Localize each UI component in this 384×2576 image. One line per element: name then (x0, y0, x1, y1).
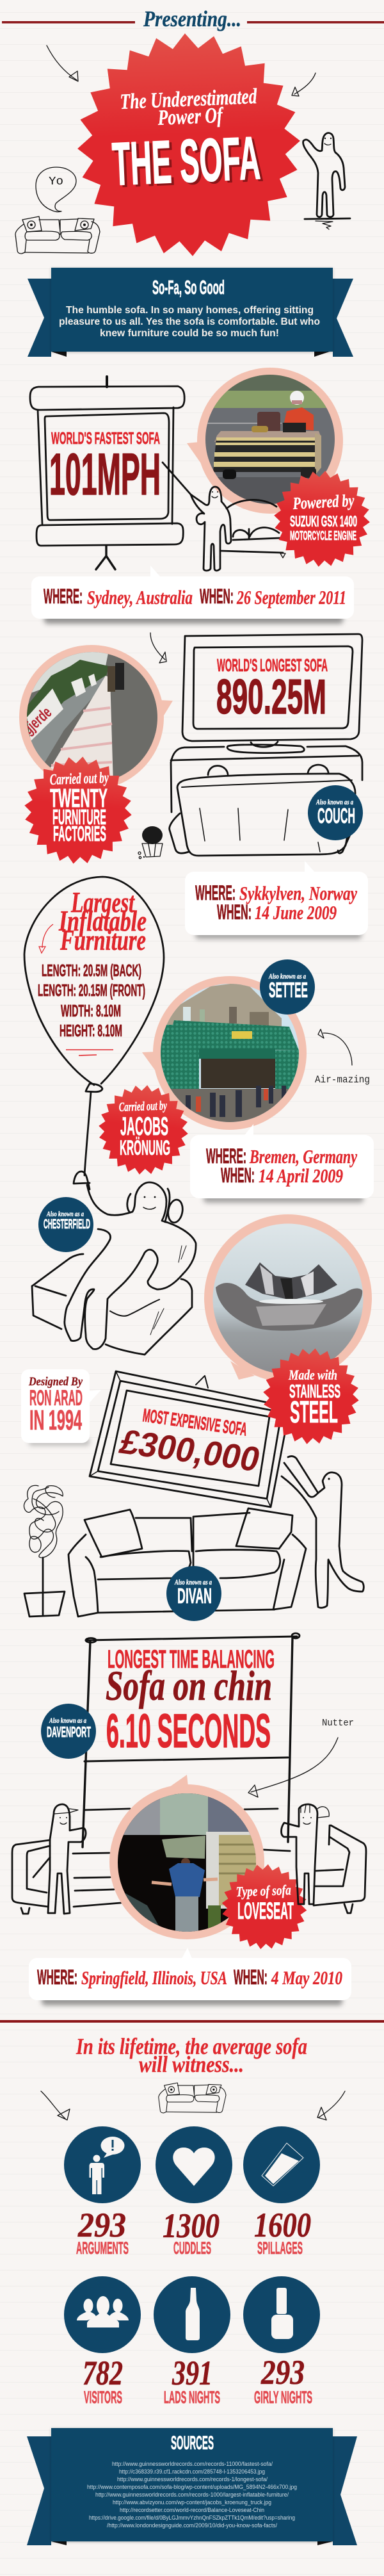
photo bubble: inflatable sofa (142, 976, 307, 1130)
starburst: powered by Suzuki: Powered by (292, 491, 355, 513)
stat: spillages (243, 2126, 320, 2258)
drawing: large sofa (68, 1508, 306, 1617)
panel: largest inflatable furniture (24, 877, 374, 1355)
callout: where and when Norway: 14 June 2009 (255, 901, 337, 924)
callout: where and when: WHERE: (44, 585, 83, 608)
icon: person with speech bubble (90, 2137, 124, 2194)
arrow: air-mazing (318, 1029, 352, 1065)
drawing: pointing figure with sofa (163, 462, 285, 571)
drawing: figure on armchair holding balloon (32, 1171, 196, 1355)
stat: balancing record (106, 1645, 275, 1757)
stat: world's longest sofa (216, 655, 328, 724)
drawing: plant (24, 1485, 65, 1617)
drawing: balloon (24, 877, 164, 1175)
note: Air-mazing: Air-mazing (315, 1074, 370, 1086)
sources list: http://www.contemposofa.com/sofa-blog/wp-content/uploads/MG_5894N2-466x700.jpg (87, 2484, 297, 2490)
stat: visitors: VISITORS (84, 2388, 122, 2407)
callout: where and when Germany (190, 1124, 374, 1203)
drawing: projector screen (30, 377, 184, 569)
stat: spillages: 1600 (254, 2206, 311, 2244)
arrow: right pointing to title (292, 73, 316, 96)
circle: also known as divan: Also known as a (174, 1577, 212, 1586)
sources list: http://www.guinnessworldrecords.com/records-1/longest-sofa/ (117, 2476, 268, 2482)
divider: red rule (0, 2020, 384, 2023)
callout: where and when USA: WHERE: (37, 1966, 77, 1989)
photo bubble: man balancing sofa (109, 1775, 264, 1939)
heading: Presenting: Presenting... (143, 6, 241, 31)
heading: largest inflatable furniture: Furniture (60, 924, 146, 956)
stat: arguments: ARGUMENTS (76, 2238, 129, 2258)
banner text (59, 305, 320, 339)
panel: largest inflatable furniture: CHESTERFIELD (44, 1217, 90, 1232)
callout: designed by Ron Arad (21, 1369, 101, 1446)
title starburst (74, 29, 304, 260)
callout: where and when: Sydney, Australia (87, 586, 193, 608)
circle: also known as settee (260, 959, 315, 1015)
photo bubble: sofa with motorcycle engine (187, 368, 343, 514)
stat: cuddles: 1300 (163, 2206, 220, 2245)
panel: world's fastest sofa (30, 368, 373, 624)
circle: also known as divan (166, 1566, 221, 1621)
arrow: toward longest sofa (150, 633, 166, 663)
stats: balloon dimensions (38, 961, 145, 1040)
drawing: television (182, 634, 362, 753)
banner: So-Fa, So Good (28, 268, 353, 357)
callout: where and when Germany: WHEN: (221, 1164, 255, 1187)
icon: sofa with cushions (15, 216, 100, 254)
circle: also known as chesterfield (38, 1197, 93, 1252)
callout: designed by Ron Arad: IN 1994 (29, 1405, 82, 1436)
icon: heart (173, 2148, 215, 2186)
stat: cuddles (156, 2126, 232, 2258)
arrow: left pointing to title (47, 45, 78, 81)
panel: most expensive sofa (21, 1214, 372, 1621)
heading: Presenting (2, 6, 384, 31)
stat: spillages: SPILLAGES (257, 2238, 303, 2258)
starburst: Jacobs Kronung (95, 1081, 192, 1178)
callout: where and when Norway: WHEN: (217, 901, 252, 924)
icon: cupcake (138, 826, 163, 859)
circle: also known as couch (308, 785, 363, 840)
stat: girly nights: GIRLY NIGHTS (254, 2388, 312, 2407)
sources list: https://drive.google.com/file/d/0ByLGJmmvYzhnQnFSZkpZTTk1QmM/edit?usp=sharing (89, 2515, 295, 2521)
heading: in its lifetime (76, 2034, 307, 2077)
drawing: figure holding frame (282, 1456, 364, 1608)
stat: most expensive sofa: MOST EXPENSIVE SOFA (141, 1405, 248, 1440)
callout: designed by Ron Arad: RON ARAD (29, 1386, 83, 1410)
circle: also known as chesterfield: Also known as a (46, 1209, 84, 1218)
icon: waving figure (303, 133, 350, 229)
stat: visitors: 782 (83, 2354, 123, 2392)
stat: lads nights (154, 2276, 230, 2407)
panel: world's longest sofa (19, 633, 368, 939)
drawing: couch (170, 746, 362, 856)
sources list: http://recordsetter.com/world-record/Balance-Loveseat-Chin (120, 2507, 264, 2513)
circle: also known as couch: Also known as a (316, 797, 353, 806)
arrow: nutter (248, 1738, 338, 1797)
heading: largest inflatable furniture: Largest (70, 886, 135, 918)
callout: where and when Norway: WHERE: (195, 881, 236, 904)
arrow: right down (317, 2091, 345, 2120)
icon: nail polish (271, 2288, 293, 2339)
drawing: right figure on armchair (282, 1804, 366, 1913)
callout: where and when USA: 4 May 2010 (271, 1968, 342, 1989)
stats: balloon dimensions: LENGTH: 20.5M (BACK) (42, 961, 141, 980)
circle: also known as davenport (41, 1704, 96, 1759)
arrow: small red (39, 924, 53, 953)
title: The Underestimated Power Of: Power Of (157, 104, 225, 130)
drawing: left figure on armchair (12, 1804, 86, 1914)
heading: in its lifetime: In its lifetime, the average sofa (76, 2034, 307, 2059)
stat: girly nights: 293 (260, 2353, 305, 2392)
banner: sources: SOURCES (171, 2433, 214, 2454)
starburst: type of sofa loveseat (218, 1861, 310, 1953)
banner text: The humble sofa. In so many homes, offering sitting (66, 305, 314, 316)
note: Nutter: Nutter (322, 1718, 354, 1729)
title: The Underestimated Power Of (120, 85, 258, 130)
stats: balloon dimensions: LENGTH: 20.15M (FRONT) (38, 981, 145, 1000)
callout: where and when (31, 566, 354, 624)
sources list: http://www.guinnessworldrecords.com/records-1000/largest-inflatable-furniture/ (95, 2491, 289, 2498)
callout: where and when USA: WHEN: (234, 1966, 268, 1989)
starburst: twenty furniture factories (20, 752, 136, 868)
callout: where and when USA (29, 1948, 351, 2005)
heading: largest inflatable furniture: Inflatable (58, 905, 147, 937)
sources list: http://www.guinnessworldrecords.com/records-11000/fastest-sofa/ (112, 2461, 273, 2467)
drawing: background sofa strokes (73, 1809, 290, 1907)
photo bubble: stainless steel sofa (204, 1214, 372, 1382)
icon: tilted glass (262, 2143, 303, 2186)
icon: three people (77, 2296, 129, 2327)
icon: beer bottle (186, 2288, 200, 2340)
photo bubble: long sofa on bridge: gjerde (19, 703, 55, 738)
stat: balancing record: Sofa on chin (106, 1663, 272, 1709)
banner: So-Fa, So Good: So-Fa, So Good (152, 276, 225, 298)
stat: cuddles: CUDDLES (173, 2238, 211, 2258)
starburst: Jacobs Kronung: JACOBS (120, 1113, 168, 1141)
starburst: type of sofa loveseat: Type of sofa (236, 1882, 291, 1900)
callout: where and when Norway (185, 861, 368, 939)
red underline strokes (66, 1050, 113, 1056)
starburst: made with stainless steel (259, 1344, 363, 1448)
starburst: made with stainless steel: Made with (288, 1367, 337, 1383)
ribbon tails (27, 2436, 357, 2545)
stat: visitors (64, 2276, 141, 2407)
sources list: /http://www.londondesignguide.com/2009/10/did-you-know-sofa-facts/ (107, 2522, 277, 2529)
ribbon tails (28, 279, 353, 357)
stat: world's fastest sofa: WORLD'S FASTEST SOFA (51, 428, 160, 448)
stats: balloon dimensions: WIDTH: 8.10M (61, 1001, 121, 1020)
callout: where and when: WHEN: (200, 585, 234, 608)
sources list: http://c368339.r39.cf1.rackcdn.com/285748-l-1353206453.jpg (119, 2468, 265, 2475)
speech bubble: Yo (36, 167, 76, 212)
photo bubble: long sofa on bridge (19, 645, 173, 790)
icon: small sofa (159, 2083, 226, 2113)
panel: world's fastest sofa: 101MPH (49, 442, 161, 507)
title: The Sofa (111, 124, 264, 200)
starburst: twenty furniture factories: Carried out by (49, 770, 109, 788)
banner text: pleasure to us all. Yes the sofa is comfortable. But who (59, 316, 320, 327)
panel: longest time balancing sofa on chin (12, 1633, 366, 2005)
heading: in its lifetime: will witness... (139, 2051, 244, 2077)
circle: also known as settee: Also known as a (268, 972, 306, 981)
callout: where and when USA: Springfield, Illinois, USA (81, 1968, 227, 1989)
drawing: sign with poles (83, 1633, 300, 1847)
banner: sources (27, 2428, 357, 2545)
sources list (87, 2461, 297, 2529)
stats: balloon dimensions: HEIGHT: 8.10M (60, 1021, 122, 1040)
heading: largest inflatable furniture (58, 886, 147, 956)
speech bubble: Yo: Yo (49, 175, 63, 188)
callout: where and when Germany: WHERE: (206, 1145, 246, 1168)
stat: lads nights: LADS NIGHTS (164, 2388, 220, 2407)
callout: designed by Ron Arad: Designed By (28, 1375, 83, 1389)
stat: arguments (64, 2126, 141, 2258)
starburst: type of sofa loveseat: LOVESEAT (237, 1898, 294, 1924)
drawing: picture frame (90, 1371, 290, 1507)
circle: also known as divan: DIVAN (177, 1584, 212, 1608)
stat: world's fastest sofa (49, 428, 161, 507)
callout: where and when Germany: 14 April 2009 (259, 1164, 343, 1187)
stat: lads nights: 391 (172, 2354, 212, 2392)
title: The Underestimated Power Of: The Underestimated (120, 85, 258, 114)
starburst: powered by Suzuki (271, 468, 373, 570)
panel: lifetime statistics (41, 2034, 345, 2407)
circle: also known as davenport: DAVENPORT (47, 1724, 91, 1740)
stat: arguments: 293 (77, 2206, 126, 2244)
starburst: Jacobs Kronung: KRÖNUNG (120, 1136, 170, 1159)
circle: also known as settee: SETTEE (269, 978, 308, 1002)
arrow: left down (41, 2091, 70, 2120)
banner text: knew furniture could be so much fun! (100, 328, 279, 339)
sources list: http://www.abvizyonu.com/wp-content/jacobs_kroenung_truck.jpg (113, 2499, 271, 2506)
starburst: twenty furniture factories: TWENTY (50, 783, 108, 813)
stat: most expensive sofa: £300,000 (116, 1423, 264, 1479)
stat: girly nights (243, 2276, 320, 2407)
starburst: twenty furniture factories: FACTORIES (53, 822, 106, 845)
starburst: Jacobs Kronung: Carried out by (118, 1098, 167, 1114)
starburst: twenty furniture factories: FURNITURE (52, 805, 106, 829)
circle: also known as davenport: Also known as a (49, 1716, 86, 1725)
